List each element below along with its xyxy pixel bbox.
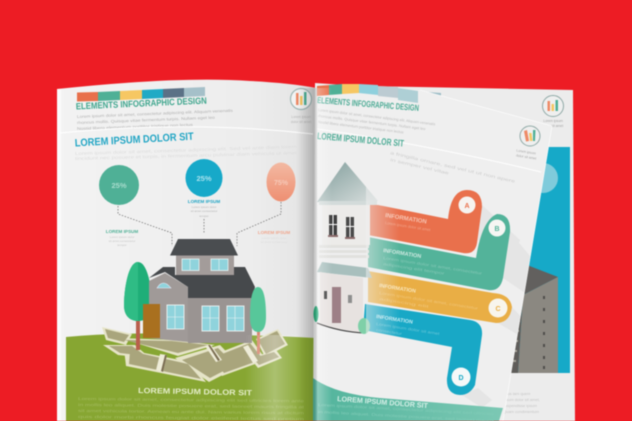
pale circle on blue panel (528, 163, 558, 193)
sheen over grass (245, 335, 305, 421)
divider (317, 129, 541, 172)
back sheet colour strip (398, 90, 441, 97)
heading: front bottom lorem ipsum dolor sit: LOREM IPSUM DOLOR SIT (337, 394, 429, 410)
intro text (77, 108, 233, 131)
back sheet text: Quam condimentum (503, 409, 540, 414)
front intro text: rhoncus mollis. Quisque vitae fermentum turpis. Nullam eget leo (318, 114, 426, 131)
front body text: in semper vel vitae (390, 157, 450, 176)
dashed connectors (118, 202, 281, 246)
ribbon D blue (363, 304, 482, 395)
label: left lorem ipsum (106, 229, 138, 247)
heading: bottom lorem ipsum dolor sit: LOREM IPSUM DOLOR SIT (138, 386, 252, 397)
ribbon B green: INFORMATION (383, 248, 422, 260)
ribbon A orange: INFORMATION (385, 213, 427, 226)
back sheet text (503, 391, 540, 414)
bottom text (78, 396, 305, 421)
label: right lorem ipsum (258, 230, 290, 244)
ribbon D blue: consectetur (376, 328, 403, 336)
front body text (390, 150, 517, 184)
label: centre lorem ipsum (188, 199, 220, 218)
icon: left tree (124, 262, 152, 350)
stat circle: blue 25% (186, 159, 222, 197)
front bottom text: Lorem ipsum dolor sit amet, consectetur adipiscing elit sed ultricies (318, 402, 494, 416)
fade over house and ribbon roots (366, 160, 400, 340)
icon: bar chart badge (290, 88, 312, 124)
ribbon D blue: INFORMATION (376, 314, 413, 326)
stat circle: green 25%: 25% (111, 181, 127, 190)
intro text: Lorem ipsum dolor sit amet, consectetur adipiscing elit. Aliquam venenatis (77, 108, 233, 119)
icon: front sheet chart badge: Lorem ipsum (516, 149, 536, 156)
intro text: Nostid libero elementum porttitor tristique non lectus (77, 122, 193, 131)
panel: front right sheet (313, 83, 552, 421)
ribbon B green: B (494, 226, 500, 233)
icon: front sheet chart badge (516, 126, 540, 161)
subheading text: tincidunt nec posuere et turpis, in fermentum arcu pulvinar diam vehicula ut amet (75, 150, 298, 161)
icon: money pile (102, 327, 288, 382)
intro text: rhoncus mollis. Quisque vitae fermentum turpis. Nullam eget leo (77, 115, 215, 125)
label: right lorem ipsum: sit amet consectetur (261, 240, 287, 244)
green hill panel (66, 333, 316, 421)
brochure mockup scene (56, 78, 576, 421)
front intro text: Lorem ipsum dolor sit amet, consectetur adipiscing elit. Aliquam venenatis (318, 108, 436, 126)
ribbon A orange (368, 190, 482, 253)
heading: front lorem ipsum dolor sit: LOREM IPSUM DOLOR SIT (317, 131, 405, 150)
colour bar on front sheet (317, 84, 418, 103)
front body text: a fringilla ornare, sed vel ut ut non apere (390, 150, 517, 184)
label: left lorem ipsum: Lorem ipsum dolor (110, 235, 134, 239)
icon: back sheet chart badge: Lorem ipsum (543, 119, 563, 123)
icon: back sheet chart badge: dolor sit amet (543, 124, 563, 128)
back sheet text: et us iam quem (503, 391, 531, 396)
back sheet text: suspendisse ipsum (503, 403, 538, 408)
teal bottom band (313, 378, 503, 421)
divider (60, 127, 313, 134)
bottom text: quis dolor morbi rhoncus feugiat dolor eleifend lectus sed pretium (78, 414, 305, 421)
label: centre lorem ipsum: sit amet consectetur (191, 209, 217, 213)
front bottom text: in mollis leo aliquet. Duis molestie posuere erat, sed laoreet mauris (318, 409, 494, 421)
illustration: house with trees on money (102, 239, 288, 382)
ribbon B green: adipiscing elit tempor (383, 262, 446, 276)
ribbon A orange: Lorem ipsum dolor sit amet (385, 221, 432, 232)
front intro text (318, 108, 436, 134)
front intro text: Nostid libero elementum porttitor tristique non lectus (318, 120, 404, 134)
icon: house (143, 239, 255, 343)
stat circle: green 25% (99, 165, 139, 205)
heading: front elements infographic design: ELEMENTS INFOGRAPHIC DESIGN (317, 95, 419, 113)
ribbon B green: Lorem ipsum dolor sit amet, consectetur (383, 256, 483, 276)
bottom text: Lorem ipsum dolor sit amet, consectetur adipiscing elit sed ultricies lorem ante (78, 396, 305, 403)
ribbon C yellow: INFORMATION (379, 283, 416, 295)
ribbon shadows (464, 206, 530, 406)
stat circle: orange 75%: 75% (274, 180, 289, 187)
icon: high-rise building (500, 265, 558, 373)
icon: bar chart badge: Lorem ipsum (291, 115, 311, 119)
label: right lorem ipsum: Lorem ipsum dolor (262, 236, 286, 240)
panel: back right sheet (315, 85, 575, 421)
ribbon B green (368, 214, 510, 290)
icon: bar chart badge: dolor sit amet (291, 120, 311, 124)
ribbon A orange: A (464, 203, 470, 210)
stat circle: orange 75% (266, 162, 296, 202)
label: left lorem ipsum: sit amet consectetur (109, 239, 135, 243)
label: centre lorem ipsum: LOREM IPSUM (188, 199, 220, 204)
heading: elements infographic design: ELEMENTS INFOGRAPHIC DESIGN (76, 96, 207, 111)
ribbon C yellow: Lorem ipsum dolor sit amet, consectetur (379, 291, 479, 311)
heading: lorem ipsum dolor sit: LOREM IPSUM DOLOR SIT (74, 131, 194, 149)
label: right lorem ipsum: LOREM IPSUM (258, 230, 290, 235)
subheading text (75, 144, 298, 161)
illustration: tall house (314, 162, 378, 334)
spine shadow (296, 88, 332, 421)
panel: left page (57, 80, 316, 421)
bottom text: sit amet vehicula tortor. Aenean eu ante dui. Nam varius lorem risus at dictum (78, 408, 305, 415)
colour bar (77, 87, 205, 102)
stat circle: blue 25%: 25% (196, 174, 212, 183)
icon: right tree (250, 287, 266, 354)
ribbon D blue: D (458, 375, 464, 382)
blue panel on back sheet (500, 147, 570, 373)
label: left lorem ipsum: LOREM IPSUM (106, 229, 138, 234)
icon: front sheet chart badge: dolor sit amet (516, 153, 537, 161)
bottom text: in mollis leo aliquet. Duis molestie posuere erat, sed laoreet mauris fringilla at (78, 402, 305, 409)
icon: back sheet chart badge (542, 96, 564, 128)
label: centre lorem ipsum: Lorem ipsum dolor (192, 205, 216, 209)
label: left lorem ipsum: tempor (117, 243, 127, 247)
ribbon C yellow (368, 271, 512, 323)
ribbon C yellow: C (495, 306, 501, 313)
back sheet text: ipsum dolor sit amet, (503, 397, 540, 402)
ribbon D blue: Lorem ipsum dolor sit amet (376, 322, 441, 336)
front bottom text (318, 402, 494, 421)
subheading text: Lorem ipsum dolor sit amet, consectetur adipiscing elit. Sed vel ante diam lorem (75, 144, 297, 156)
label: centre lorem ipsum: tempor (199, 214, 209, 218)
ribbon C yellow: adipiscing elit (379, 297, 431, 309)
